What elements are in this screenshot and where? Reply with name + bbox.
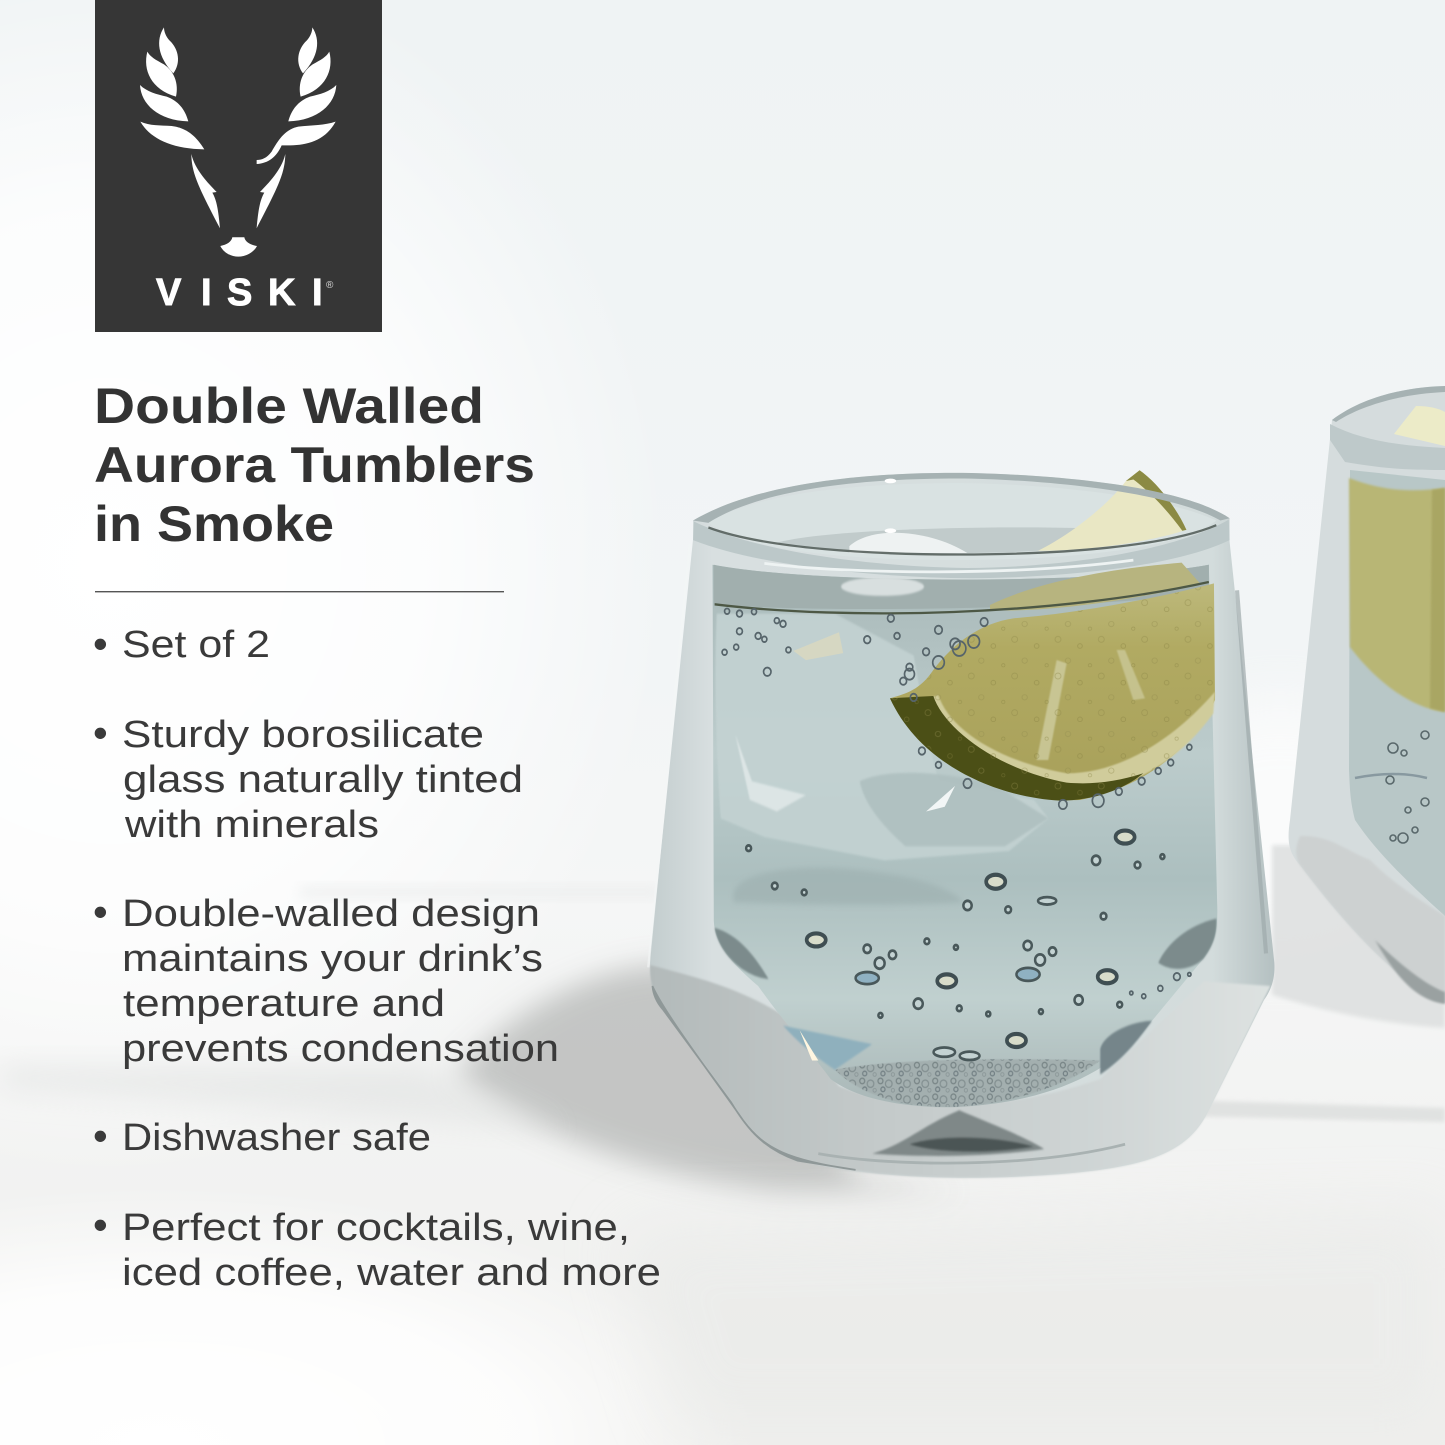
title: in Smoke [94,496,334,552]
second tumbler liquid [1349,470,1445,916]
bubbles near surface and lime [722,608,1192,999]
bullet: double-walled design [93,888,559,1070]
bullet: dishwasher safe: Dishwasher safe [122,1117,431,1159]
registered mark: ® [326,280,334,291]
liquid [713,565,1217,1107]
logo wordmark: VISKI [156,272,323,314]
rim top arc [693,473,1230,523]
bullet: perfect for: iced coffee, water and more [122,1252,661,1294]
ice cubes [716,533,1048,860]
liquid upper band [714,565,1209,609]
icon: stag antlers logo [140,27,336,257]
large bubbles [807,831,1135,1047]
bowl fizz bottom [835,1059,1100,1107]
glass outer body [650,473,1274,1178]
rim front [693,520,1230,578]
bullet: double-walled design: Double-walled design [122,893,540,935]
title: Double Walled [94,378,484,434]
glass rim interior [708,483,1216,560]
bullet: borosilicate glass: with minerals [124,804,379,846]
feature list [93,620,661,1294]
blue glint [783,1026,872,1070]
bullet: borosilicate glass: glass naturally tinted [123,759,523,801]
divider [95,591,504,592]
small bubbles [746,845,1164,1060]
bullet: borosilicate glass: Sturdy borosilicate [122,714,484,756]
bullet: set of 2: Set of 2 [122,624,270,666]
bullet: borosilicate glass [93,709,523,846]
bullet: perfect for [93,1201,661,1294]
bullet: set of 2 [93,620,270,667]
glass highlights [648,544,690,967]
bullet: set of 2: • [93,620,108,667]
rim white streak [764,560,1133,572]
water line [715,582,1209,613]
bullet: double-walled design: temperature and [123,983,445,1025]
lime wedge [890,563,1215,801]
bullet: dishwasher safe: • [93,1112,108,1159]
bullet: borosilicate glass: • [93,709,108,756]
title: Aurora Tumblers [94,437,535,493]
second tumbler lemon wedge [1394,406,1445,446]
glass lower base [650,965,1270,1178]
second tumbler lime [1349,478,1445,712]
bullet: perfect for: Perfect for cocktails, wine, [122,1207,630,1249]
rim inner dark line [708,525,1216,554]
liquid mid shadow [733,868,963,905]
bullet: perfect for: • [93,1201,108,1248]
second tumbler (cropped at right edge) [1289,386,1445,1004]
base dark spot [872,1110,1044,1156]
main tumbler [648,470,1274,1178]
table shadow [0,845,1445,1430]
lemon wedge above the rim [1038,470,1186,551]
bullet: double-walled design: maintains your drink’s [122,938,543,980]
bullet: double-walled design: • [93,888,108,935]
bullet: double-walled design: prevents condensation [122,1028,559,1070]
right dark patch [1100,1021,1152,1074]
base edge shading [652,986,856,1170]
second tumbler base [1296,836,1445,1003]
second tumbler bubbles [1355,731,1429,843]
logo panel [95,0,382,332]
title [94,378,535,552]
